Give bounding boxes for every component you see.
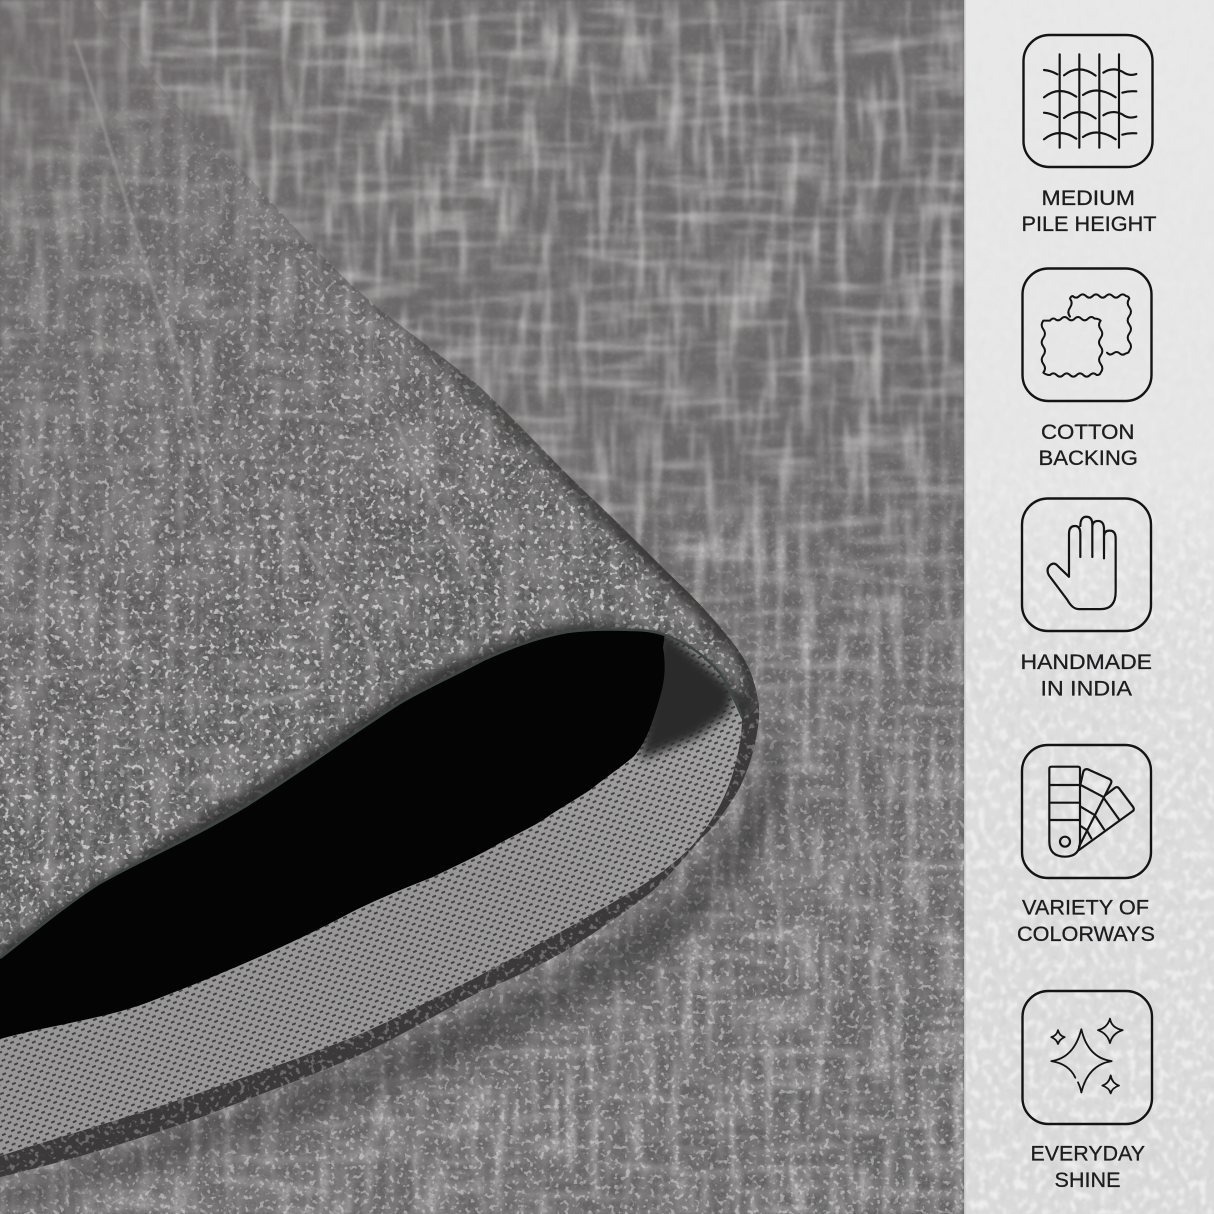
seam line of backing edge: [0, 629, 742, 958]
streaks on flap: [75, 40, 480, 720]
feature: handmade in india: [1020, 498, 1152, 700]
feature: variety of colorways: [1017, 745, 1155, 946]
rug backing underside: [0, 600, 760, 1170]
rug lower pile rim: [0, 690, 780, 1190]
label: variety of colorways: [1017, 896, 1155, 946]
label: handmade in india: IN INDIA: [1040, 678, 1132, 700]
label: handmade in india: [1020, 651, 1152, 700]
flap edge shading: [0, 631, 753, 958]
label: everyday shine: EVERYDAY: [1030, 1142, 1145, 1166]
soft shadow under folded rug: [0, 730, 790, 1205]
feature: cotton backing: [1022, 268, 1152, 470]
icon: hand: [1022, 498, 1151, 631]
rug floor photo background: [0, 0, 964, 1214]
rolled rug flap: [0, 0, 770, 970]
icon: sparkles: [1022, 991, 1152, 1124]
icon: colour fan deck: [1022, 745, 1151, 878]
shaded curl of backing: [640, 625, 735, 760]
label: variety of colorways: COLORWAYS: [1017, 923, 1155, 946]
panel: feature column: [964, 0, 1214, 1214]
label: cotton backing: COTTON: [1041, 421, 1134, 444]
label: everyday shine: [1030, 1142, 1145, 1192]
icon: fabric swatches: [1022, 268, 1152, 401]
dark inner shadow of the fold: [0, 600, 670, 1039]
label: medium pile height: MEDIUM: [1042, 187, 1135, 210]
label: variety of colorways: VARIETY OF: [1022, 896, 1149, 920]
feature: medium pile height: [1022, 35, 1157, 236]
label: cotton backing: [1038, 421, 1138, 470]
icon: woven pile: [1024, 35, 1152, 167]
label: everyday shine: SHINE: [1054, 1169, 1120, 1192]
label: cotton backing: BACKING: [1038, 447, 1138, 470]
label: medium pile height: [1022, 187, 1157, 236]
label: handmade in india: HANDMADE: [1020, 651, 1152, 674]
feature: everyday shine: [1022, 991, 1152, 1192]
label: medium pile height: PILE HEIGHT: [1022, 213, 1157, 236]
